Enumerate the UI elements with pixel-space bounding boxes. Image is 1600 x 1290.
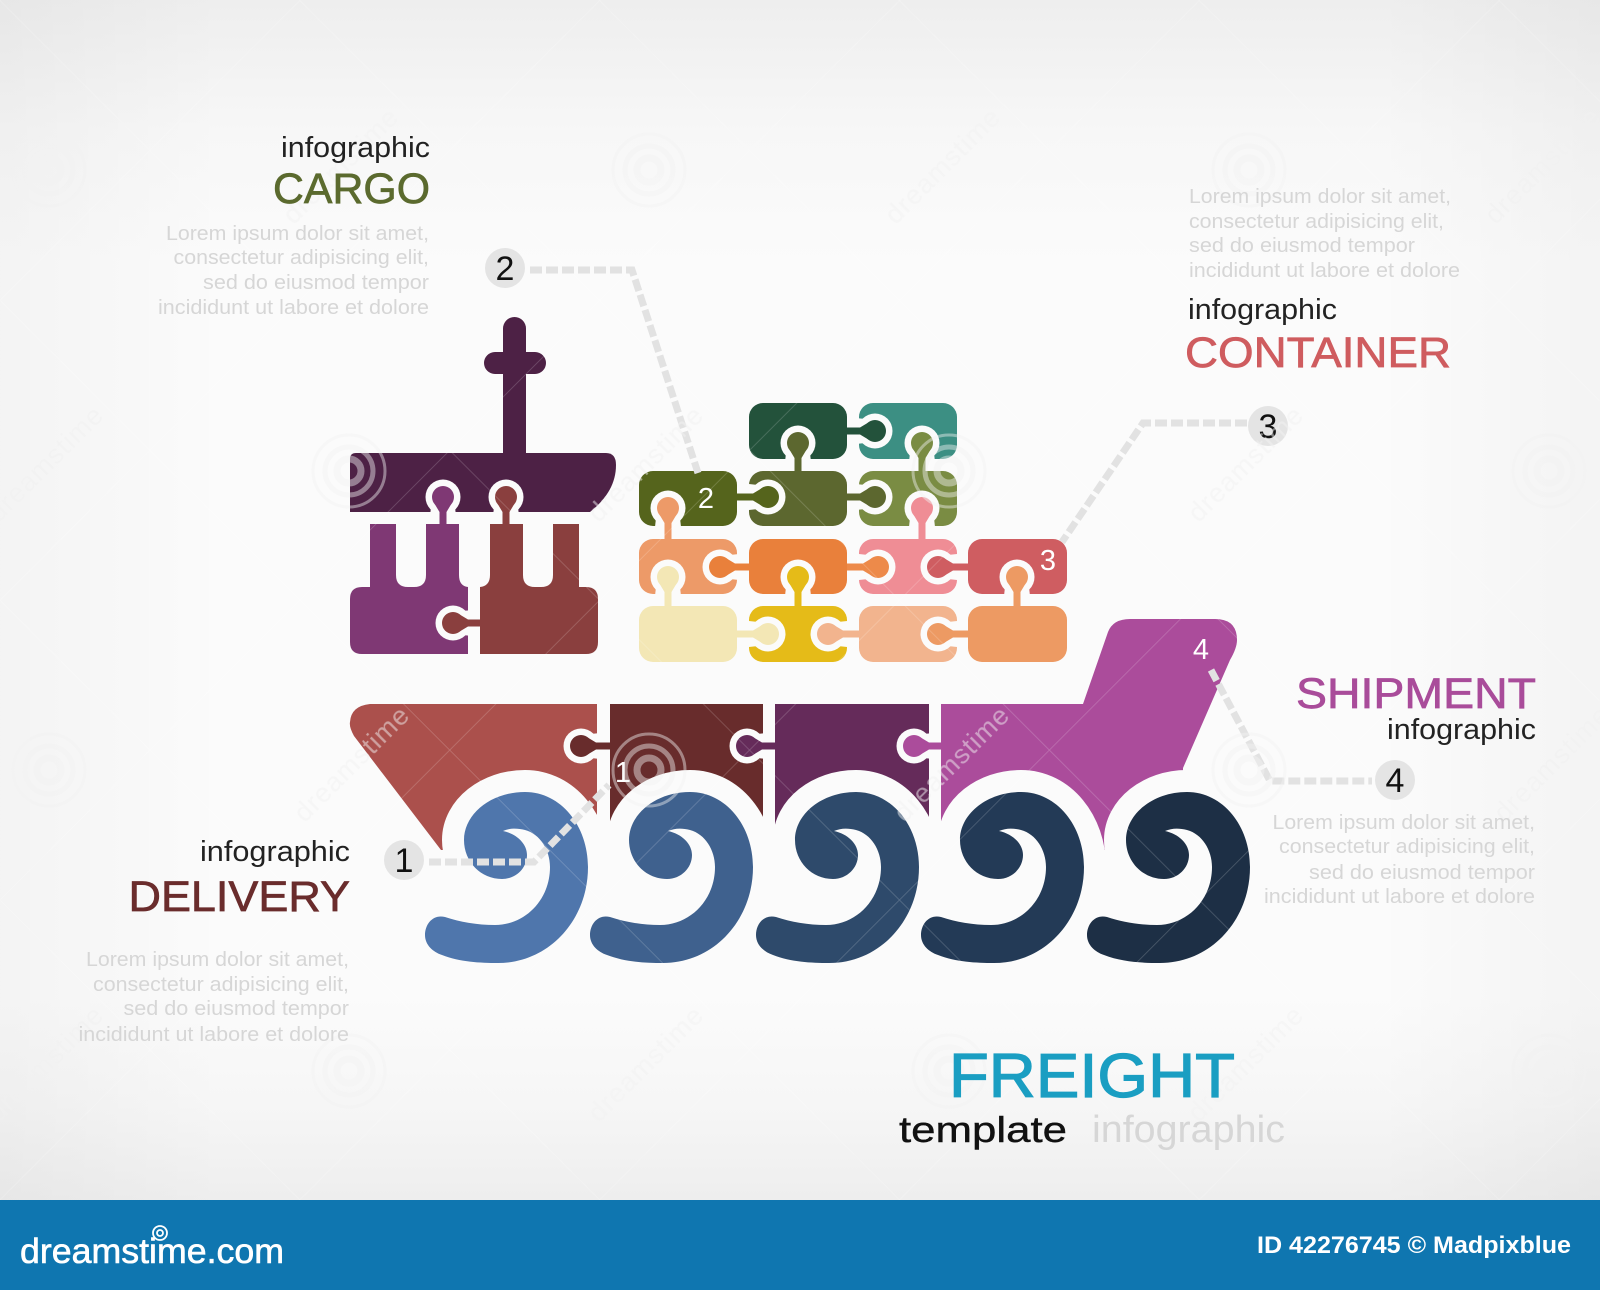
- connector knob brown up: [488, 480, 524, 528]
- watermark overlay: dreamstime: [582, 400, 710, 528]
- wave 4: [921, 792, 1084, 963]
- number badge 1: [384, 840, 424, 880]
- body: container: Lorem ipsum dolor sit amet,: [1189, 185, 1451, 208]
- hull piece red: [350, 704, 597, 850]
- label: shipment: infographic: [1387, 714, 1536, 746]
- connector knob purple: [426, 480, 460, 528]
- container row 3: [639, 539, 1067, 594]
- body: cargo: incididunt ut labore et dolore: [158, 296, 429, 319]
- footer logo icon: [153, 1226, 167, 1240]
- right funnel block: [480, 524, 598, 654]
- watermark overlay: dreamstime: [1182, 400, 1310, 528]
- container stack: [639, 403, 1067, 662]
- body: container: consectetur adipisicing elit,: [1189, 210, 1444, 233]
- body: shipment: sed do eiusmod tempor: [1309, 861, 1535, 884]
- body: shipment: [1264, 811, 1535, 908]
- number badge 2: 2: [496, 250, 514, 288]
- body: shipment: Lorem ipsum dolor sit amet,: [1272, 811, 1535, 834]
- body: cargo: Lorem ipsum dolor sit amet,: [166, 222, 429, 245]
- number badge 4: 4: [1386, 762, 1404, 800]
- ship hull: [350, 619, 1237, 850]
- connector 3: [1062, 423, 1247, 542]
- connector knob brown left: [436, 606, 484, 640]
- heading: delivery: DELIVERY: [128, 873, 350, 921]
- waves: [425, 792, 1250, 963]
- number badge 4: [1375, 760, 1415, 800]
- number badge 3: [1248, 406, 1288, 446]
- footer credit: ID 42276745 © Madpixblue: [1257, 1232, 1571, 1259]
- hull piece plum: [775, 704, 929, 850]
- connector 1: [429, 785, 609, 862]
- text block: cargo: [158, 132, 430, 319]
- title: freight: FREIGHT: [949, 1042, 1235, 1111]
- hull knob plum: [730, 728, 778, 764]
- footer logo: dreamstime.com: [20, 1232, 284, 1271]
- watermark overlay: dreamstime: [582, 1000, 710, 1128]
- body: container: sed do eiusmod tempor: [1189, 234, 1415, 257]
- body: cargo: sed do eiusmod tempor: [203, 271, 429, 294]
- heading: cargo: CARGO: [273, 165, 430, 213]
- hull piece maroon: [610, 704, 763, 850]
- wave halos: [425, 792, 1250, 963]
- wave 2: [590, 792, 753, 963]
- wave 5: [1087, 792, 1250, 963]
- body: cargo: consectetur adipisicing elit,: [174, 246, 429, 269]
- body: shipment: incididunt ut labore et dolore: [1264, 885, 1535, 908]
- footer bar: [0, 1200, 1600, 1290]
- watermark overlay: [0, 102, 1600, 1128]
- text block: delivery: [78, 836, 350, 1046]
- number badge 1: 1: [395, 842, 413, 880]
- body: container: incididunt ut labore et dolore: [1189, 259, 1460, 282]
- shape number 4: 4: [1193, 634, 1209, 666]
- number badge 3: 3: [1259, 408, 1277, 446]
- body: delivery: sed do eiusmod tempor: [124, 997, 349, 1020]
- watermark overlay: dreamstime: [879, 102, 1007, 230]
- body: delivery: [78, 948, 349, 1046]
- mast: [484, 317, 546, 453]
- heading: container: CONTAINER: [1185, 329, 1451, 377]
- shape number 1: 1: [615, 757, 631, 789]
- connector 4: [1211, 670, 1372, 781]
- number badge 2: [485, 248, 525, 288]
- watermark overlay: dreamstime: [888, 700, 1016, 828]
- hull knob maroon: [564, 728, 612, 764]
- text block: delivery: infographic: [200, 836, 350, 868]
- container row 1: [749, 403, 957, 459]
- left funnel block: [350, 524, 468, 654]
- body: delivery: Lorem ipsum dolor sit amet,: [86, 948, 349, 971]
- watermark overlay: dreamstime: [1182, 1000, 1310, 1128]
- container row 2: [639, 471, 957, 526]
- bridge deck: [350, 453, 616, 512]
- text block: shipment: [1264, 670, 1536, 908]
- text block: container: [1185, 185, 1460, 377]
- wave 1: [425, 792, 588, 963]
- wave 3: [756, 792, 919, 963]
- body: cargo: [158, 222, 429, 319]
- body: delivery: consectetur adipisicing elit,: [93, 973, 349, 996]
- watermark overlay: dreamstime: [288, 700, 416, 828]
- container connector knobs: [650, 414, 1034, 652]
- subtitle: infographic: infographic: [1092, 1109, 1285, 1151]
- watermark overlay: dreamstime: [277, 102, 405, 230]
- body: shipment: consectetur adipisicing elit,: [1279, 835, 1535, 858]
- container row 4: [639, 606, 1067, 662]
- ship superstructure: [350, 317, 616, 654]
- body: delivery: incididunt ut labore et dolore: [78, 1023, 349, 1046]
- connector 2: [530, 270, 698, 473]
- text block: cargo: infographic: [281, 132, 430, 164]
- shape number 2: 2: [698, 483, 714, 515]
- hull knob magenta: [896, 728, 945, 764]
- shape number 3: 3: [1040, 545, 1056, 577]
- text block: shipment: SHIPMENT: [1296, 670, 1536, 718]
- body: container: [1189, 185, 1460, 282]
- hull piece magenta with bow: [941, 619, 1237, 850]
- subtitle: template: template: [899, 1109, 1067, 1150]
- text block: container: infographic: [1188, 294, 1337, 326]
